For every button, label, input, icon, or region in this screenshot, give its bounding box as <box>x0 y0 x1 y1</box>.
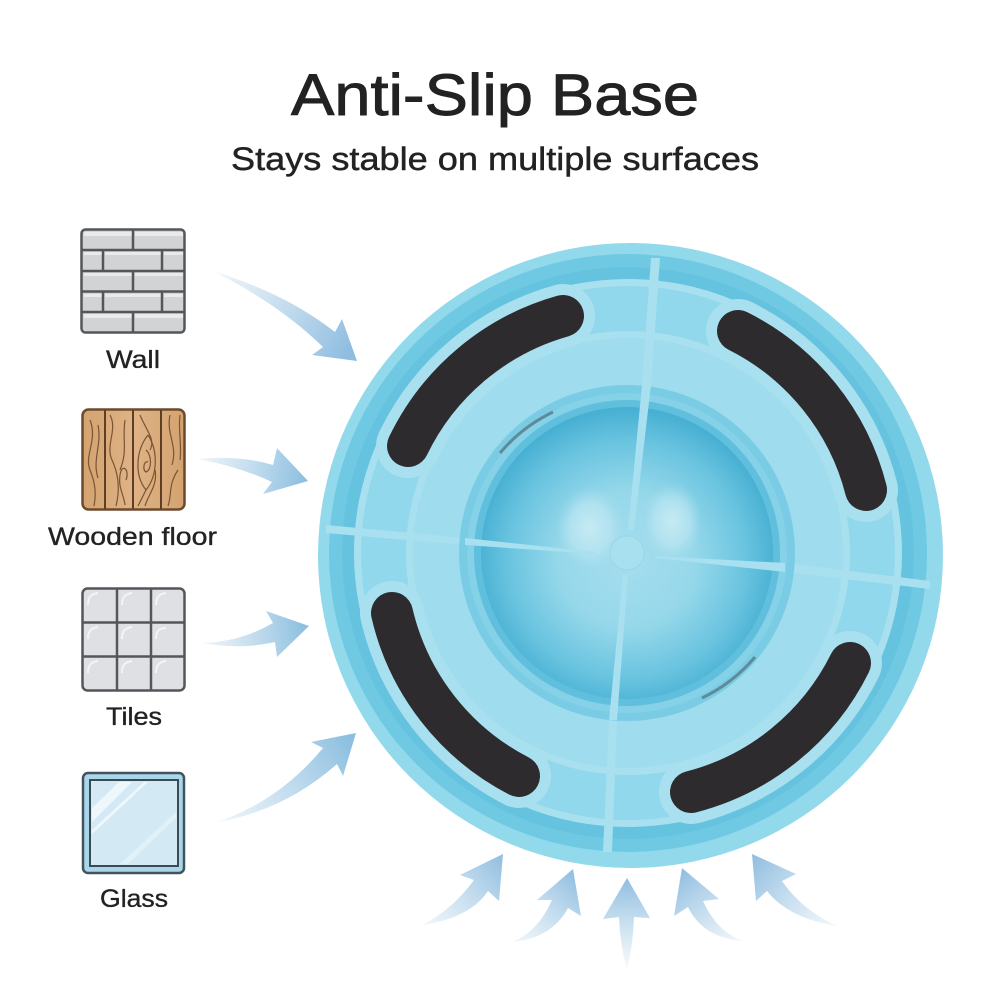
channel <box>329 254 927 852</box>
arrow: wall <box>215 272 357 361</box>
arrow: wooden floor <box>198 448 308 494</box>
ribs inner <box>465 385 785 720</box>
label: tiles: Tiles <box>106 703 162 731</box>
outer rim <box>318 243 943 868</box>
label: wooden floor: Wooden floor <box>48 523 217 551</box>
icon: brick wall <box>82 230 184 332</box>
arrow: glass <box>218 733 356 822</box>
bowl <box>459 385 795 721</box>
icon: glass <box>83 773 184 873</box>
product: anti-slip base <box>318 243 943 868</box>
icon: wooden floor <box>82 410 184 510</box>
outer ridge and mid ring <box>354 279 902 827</box>
arrows: bottom group <box>422 854 837 970</box>
slots <box>500 412 755 698</box>
arrow: tiles <box>203 611 309 657</box>
black anti-slip pads <box>392 316 866 792</box>
title: Anti-Slip Base <box>291 63 699 128</box>
icon: tiles <box>82 588 184 690</box>
label: wall: Wall <box>106 346 160 374</box>
ribs outer <box>326 258 930 852</box>
label: glass: Glass <box>100 885 168 913</box>
pad halos <box>392 316 866 792</box>
subtitle: Stays stable on multiple surfaces <box>231 141 759 177</box>
